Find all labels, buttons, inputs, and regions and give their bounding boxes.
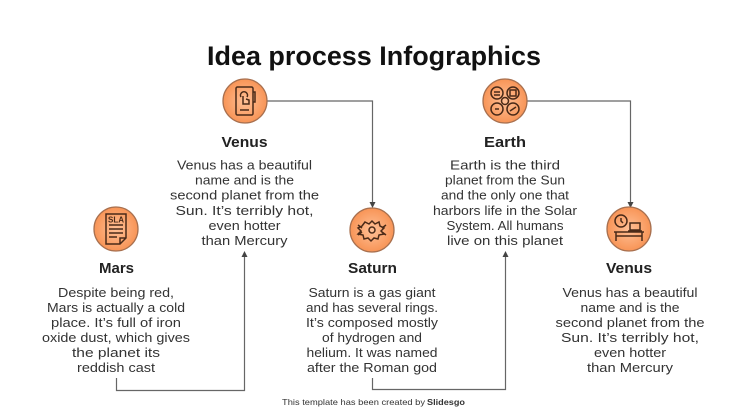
text block: Mars: place. It’s full of iron xyxy=(51,316,181,330)
text block: Earth: harbors life in the Solar xyxy=(433,204,577,218)
text block: Saturn: helium. It was named xyxy=(306,346,438,360)
text block: Venus: than Mercury xyxy=(202,234,288,248)
icon: SLA document: SLA xyxy=(108,214,124,224)
text block: Venus right: Sun. It’s terribly hot, xyxy=(561,331,699,345)
text block: Mars: Mars is actually a cold xyxy=(47,301,185,315)
text block: Earth: planet from the Sun xyxy=(445,174,565,188)
text block: Mars: Despite being red, xyxy=(58,286,174,300)
title: Idea process Infographics xyxy=(207,41,541,71)
arrow: Mars to Venus xyxy=(116,251,248,390)
icon: desk with laptop and clock xyxy=(607,207,651,251)
icon: four connected circles xyxy=(483,79,527,123)
text block: Venus: Sun. It’s terribly hot, xyxy=(176,204,314,218)
text block: Earth xyxy=(433,158,577,248)
text block: Earth: Earth is the third xyxy=(450,158,560,172)
text block: Mars: reddish cast xyxy=(77,361,156,375)
text block: Venus: Venus has a beautiful xyxy=(177,158,312,172)
text block: Venus: second planet from the xyxy=(170,188,319,202)
text block: Earth: System. All humans xyxy=(446,219,564,233)
text block: Saturn: It’s composed mostly xyxy=(306,316,439,330)
text block: Mars xyxy=(42,286,190,375)
text block: Venus right: even hotter xyxy=(594,346,666,360)
text block: Earth: and the only one that xyxy=(441,188,570,202)
arrow: Venus to Saturn xyxy=(267,101,376,208)
arrow: Saturn to Earth xyxy=(372,251,508,390)
text block: Saturn: after the Roman god xyxy=(307,361,437,375)
arrow: Earth to Venus xyxy=(527,101,634,208)
text block: Venus: name and is the xyxy=(195,174,294,188)
text block: Venus right: than Mercury xyxy=(587,361,674,375)
text block: Venus xyxy=(170,158,319,248)
icon: gear cluster xyxy=(350,208,394,252)
text block: Saturn: of hydrogen and xyxy=(322,331,422,345)
text block: Saturn: and has several rings. xyxy=(306,301,438,315)
text block: Venus right xyxy=(556,286,705,375)
text block: Saturn xyxy=(306,286,439,375)
text block: Mars: oxide dust, which gives xyxy=(42,331,190,345)
heading: Venus: Venus xyxy=(222,134,268,151)
icon: phone touch xyxy=(223,79,267,123)
footer credit: Slidesgo xyxy=(427,397,465,407)
text block: Venus right: second planet from the xyxy=(556,316,705,330)
text block: Mars: the planet its xyxy=(72,346,160,360)
text block: Earth: live on this planet xyxy=(447,234,564,248)
text block: Saturn: Saturn is a gas giant xyxy=(308,286,436,300)
text block: Venus right: name and is the xyxy=(580,301,680,315)
heading: Mars: Mars xyxy=(99,260,134,277)
icon: SLA document xyxy=(94,207,138,251)
heading: Venus right: Venus xyxy=(606,260,652,277)
heading: Earth: Earth xyxy=(484,134,526,151)
text block: Venus: even hotter xyxy=(208,219,280,233)
heading: Saturn: Saturn xyxy=(348,260,397,277)
text block: Venus right: Venus has a beautiful xyxy=(562,286,698,300)
footer credit: This template has been created by xyxy=(282,397,426,407)
